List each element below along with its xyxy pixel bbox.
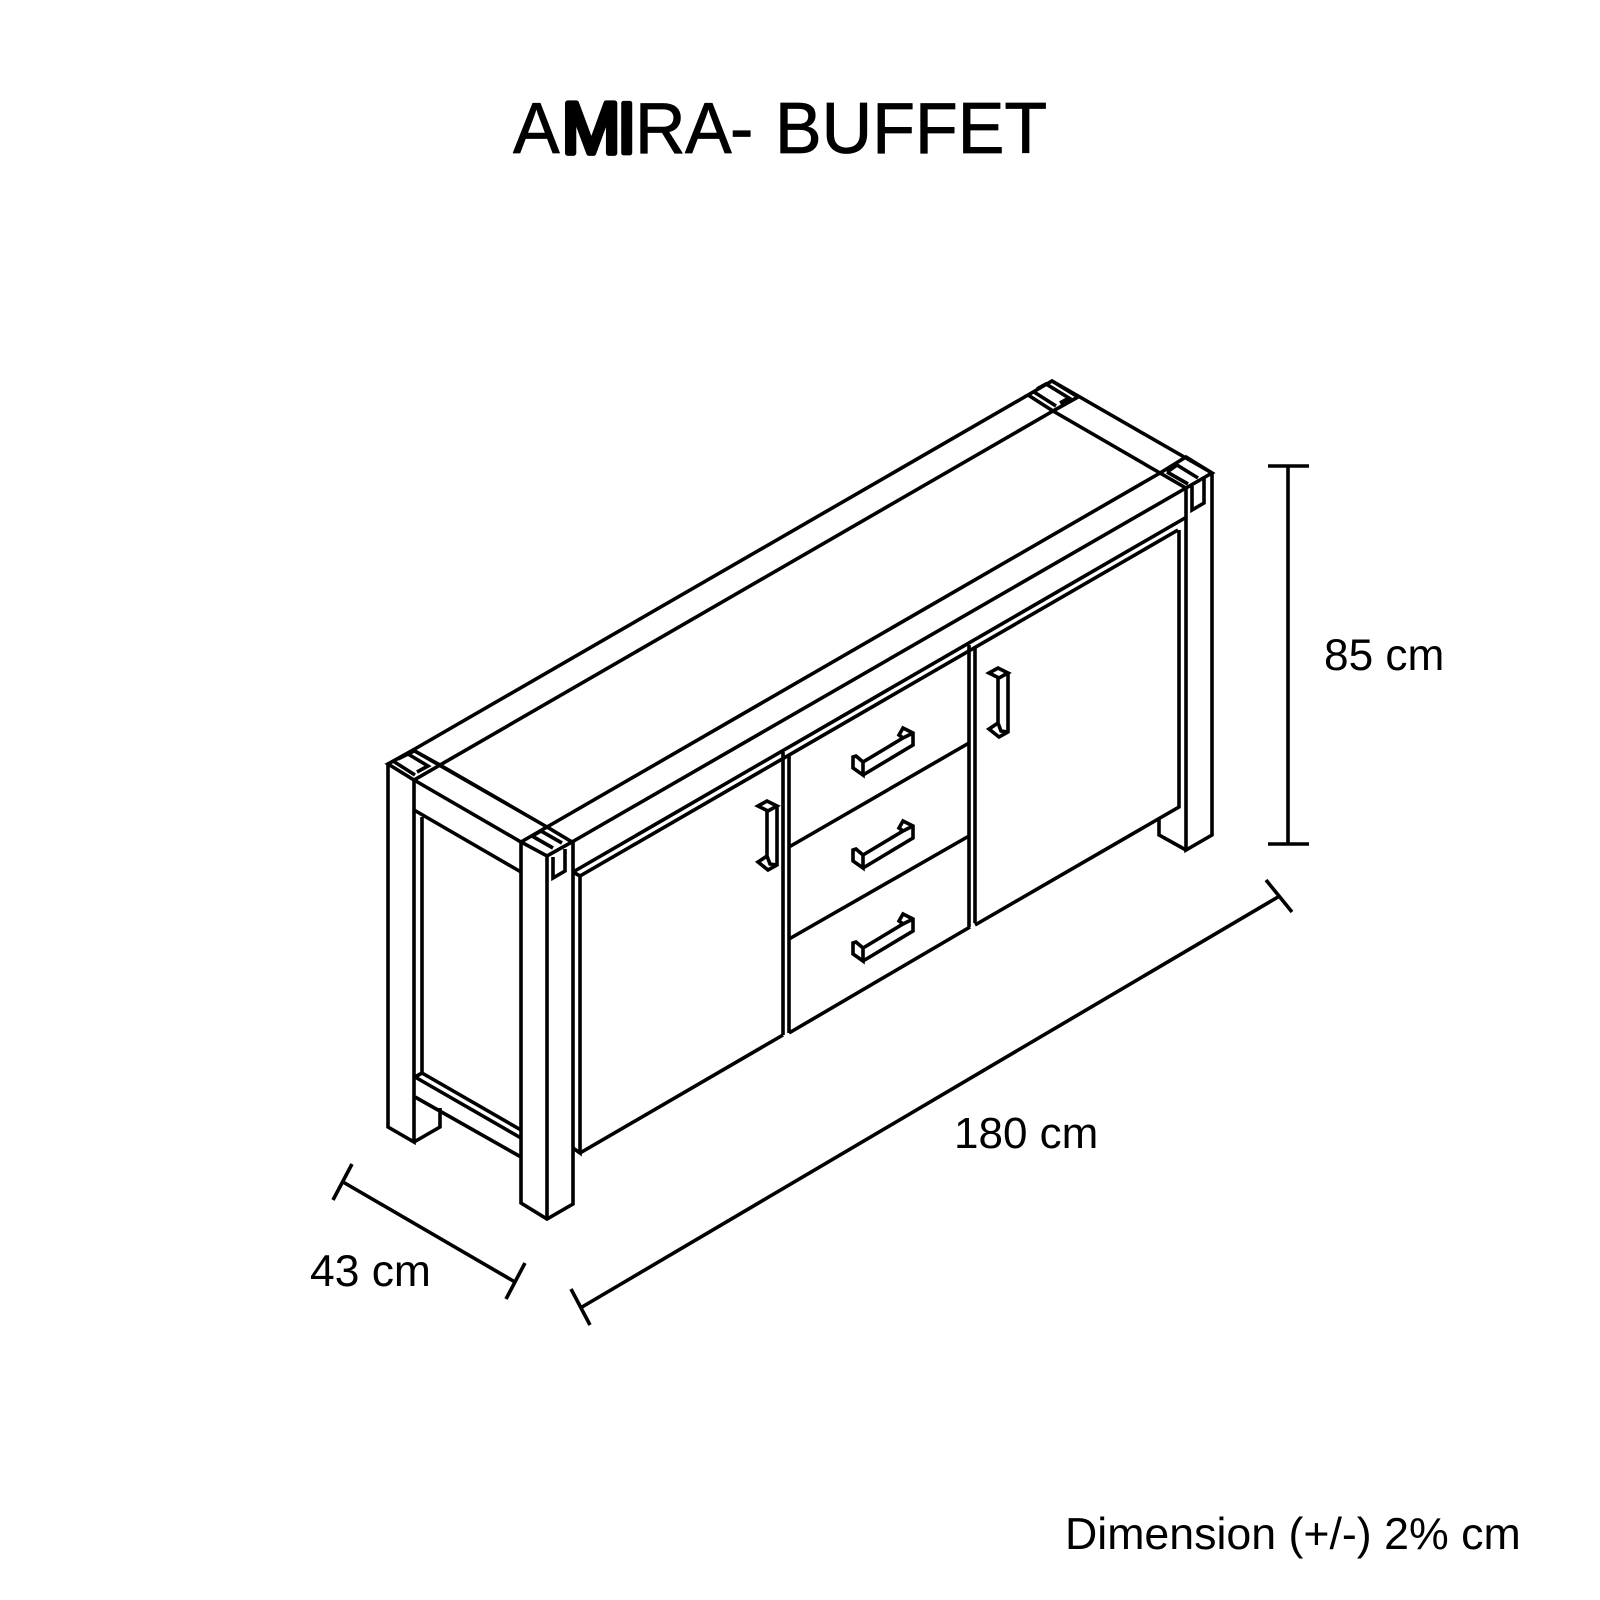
dimension: height 85 cm: 85 cm <box>1324 631 1444 680</box>
title: M <box>562 88 620 169</box>
tenon: front left corner with slot <box>521 827 572 878</box>
back right leg and foot <box>1159 473 1212 850</box>
long front rails <box>573 518 1185 876</box>
front left leg <box>521 842 573 1219</box>
drawer handle 1 <box>853 728 913 775</box>
drawer handle 2 <box>853 821 913 868</box>
top drawer divider <box>789 743 969 847</box>
top surface with end boards <box>413 381 1212 842</box>
title: A <box>685 88 732 169</box>
title: BUFFET <box>775 88 1047 169</box>
dimension: width 180 cm: 180 cm <box>954 1109 1098 1158</box>
right door <box>975 530 1179 925</box>
dimension: height 85 cm <box>1268 466 1444 844</box>
drawer stack frame <box>783 645 975 1035</box>
dimension: depth 43 cm: 43 cm <box>310 1247 431 1296</box>
drawer handle 3 <box>853 914 913 961</box>
back left leg and foot <box>388 764 440 1142</box>
title: A <box>513 88 560 169</box>
dimension: depth 43 cm <box>310 1164 525 1299</box>
left door <box>573 876 783 1153</box>
tenon: back left corner <box>388 750 440 780</box>
title: I <box>617 88 636 169</box>
tenon: front right corner with slot <box>1160 457 1212 510</box>
side rails <box>414 780 521 1157</box>
title <box>513 88 1047 169</box>
tenon: back right corner <box>1028 381 1078 411</box>
dimension: width 180 cm <box>571 880 1292 1325</box>
left door handle <box>758 801 777 870</box>
lower drawer divider <box>789 836 969 939</box>
title: R <box>635 88 686 169</box>
title: - <box>730 88 753 169</box>
buffet line drawing <box>388 381 1212 1219</box>
tolerance note: Dimension (+/-) 2% cm <box>1065 1510 1521 1559</box>
right door handle <box>989 668 1008 737</box>
